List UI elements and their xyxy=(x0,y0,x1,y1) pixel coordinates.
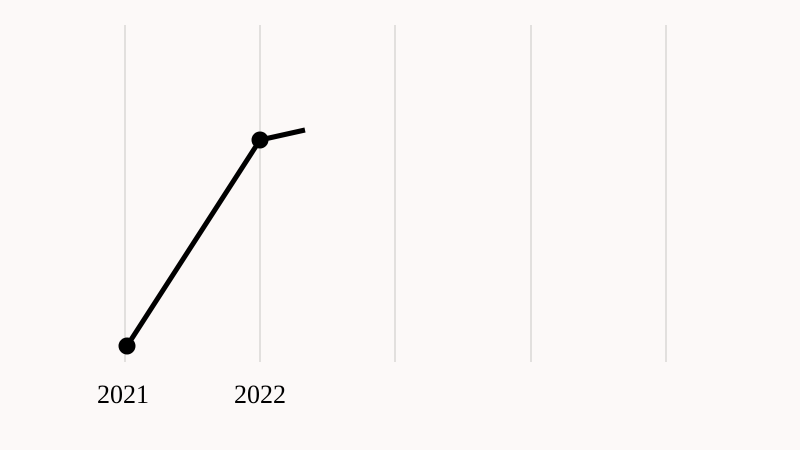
x-axis labels: 2022 xyxy=(234,380,286,409)
x-axis labels xyxy=(97,380,286,409)
data line xyxy=(118,130,305,354)
x-axis labels: 2021 xyxy=(97,380,149,409)
